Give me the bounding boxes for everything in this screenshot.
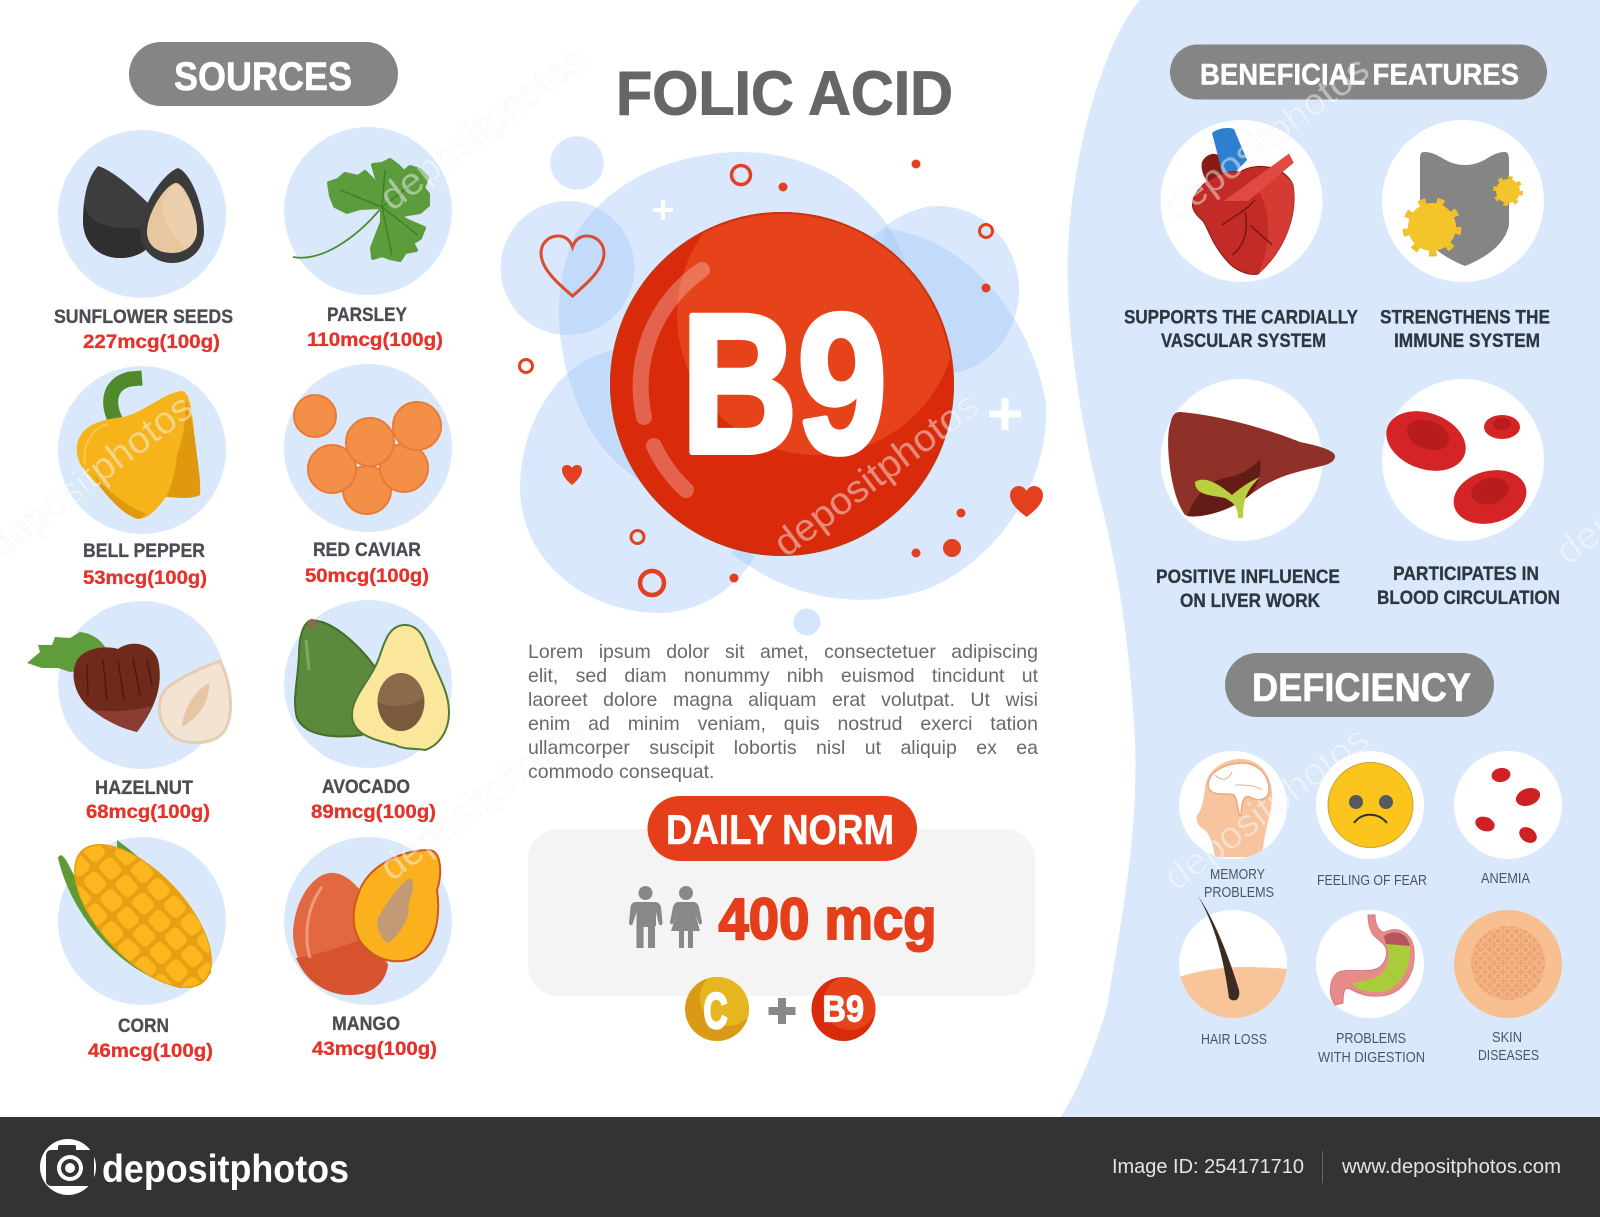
label: sunflower seeds: SUNFLOWER SEEDS: [54, 307, 233, 328]
icon: B9 ball: B9: [822, 989, 864, 1030]
label: liver: ON LIVER WORK: [1180, 591, 1320, 612]
label: hazelnut: 68mcg(100g): [86, 802, 210, 823]
label: avocado: [311, 777, 436, 823]
label: hazelnut: HAZELNUT: [95, 778, 193, 799]
icon: red caviar: [284, 364, 452, 532]
label: red caviar: RED CAVIAR: [313, 540, 421, 561]
heading: daily norm: DAILY NORM: [666, 806, 894, 853]
label: skin diseases: [1478, 1030, 1539, 1064]
label: skin diseases: SKIN: [1492, 1030, 1522, 1046]
label: mango: [312, 1014, 437, 1060]
watermarks: depositphotos: [372, 38, 593, 219]
icon: anemia cells: [1454, 751, 1562, 859]
paragraph text block: commodo consequat.: [528, 761, 714, 783]
box background: [528, 829, 1035, 996]
label: memory problems: [1204, 867, 1274, 901]
label: digestion: WITH DIGESTION: [1318, 1050, 1425, 1066]
label: red caviar: 50mcg(100g): [305, 566, 429, 587]
watermarks: [0, 38, 1600, 899]
vitamin B9 big ball: [610, 212, 954, 556]
icon: B9 ball: [812, 976, 877, 1041]
panel: beneficial features: [1124, 44, 1560, 612]
label: mango: MANGO: [332, 1014, 400, 1035]
label: digestion: [1318, 1031, 1425, 1066]
label: avocado: 89mcg(100g): [311, 802, 436, 823]
icon: outline heart: [541, 236, 604, 296]
label: cardiovascular: [1124, 308, 1358, 352]
icon: footer logo: [40, 1139, 96, 1195]
paragraph text block: elit, sed diam nonummy nibh euismod tincidunt ut: [528, 665, 1038, 687]
label: blood circulation: [1377, 564, 1560, 609]
heading: beneficial features: [1170, 44, 1547, 100]
label: parsley: [307, 305, 443, 351]
label: red caviar: [305, 540, 429, 587]
label: avocado: AVOCADO: [322, 777, 410, 798]
label: digestion: PROBLEMS: [1336, 1031, 1406, 1047]
label: parsley: 110mcg(100g): [307, 330, 443, 351]
title: FOLIC ACID: [616, 60, 953, 128]
value: 400 mcg: 400 mcg: [718, 887, 936, 952]
label: bell pepper: 53mcg(100g): [83, 568, 207, 589]
label: skin diseases: DISEASES: [1478, 1048, 1539, 1064]
background blobs: [500, 136, 1046, 613]
label: hair loss: HAIR LOSS: [1201, 1032, 1267, 1048]
icon: parsley: [284, 127, 452, 295]
paragraph text block: ullamcorper suscipit lobortis nisl ut aliquip ex ea: [528, 737, 1038, 759]
icon: stomach: [1316, 910, 1424, 1018]
label: liver: POSITIVE INFLUENCE: [1156, 567, 1340, 588]
paragraph text block: Lorem ipsum dolor sit amet, consectetuer adipiscing: [528, 641, 1038, 663]
label: blood circulation: PARTICIPATES IN: [1393, 564, 1539, 585]
icon: vitamin C ball: C: [704, 983, 728, 1039]
paragraph text block: enim ad minim veniam, quis nostrud exerci tation: [528, 713, 1038, 735]
panel: sources: [27, 42, 452, 1062]
icon: skin: [1454, 910, 1562, 1018]
icon: sad face: [1316, 751, 1424, 859]
icon: plus: [768, 998, 796, 1024]
icon: sunflower seeds: [58, 130, 226, 298]
panel: deficiency: [1179, 653, 1562, 1066]
heading: deficiency: DEFICIENCY: [1252, 666, 1471, 710]
label: corn: [88, 1016, 213, 1062]
label: immune: IMMUNE SYSTEM: [1394, 331, 1540, 352]
icon: small filled heart: [562, 465, 582, 485]
footer image id: Image ID: 254171710: [1112, 1156, 1304, 1178]
heading: sources: [129, 42, 398, 106]
label: parsley: PARSLEY: [327, 305, 407, 326]
icon: heart organ: [1160, 120, 1322, 282]
label: sunflower seeds: 227mcg(100g): [83, 332, 220, 353]
label: mango: 43mcg(100g): [312, 1039, 437, 1060]
label: liver: [1156, 567, 1340, 612]
right background panel: [1061, 0, 1600, 1117]
icon: hair: [1179, 896, 1288, 1020]
paragraph text block: laoreet dolore magna aliquam erat volutpat. Ut wisi: [528, 689, 1038, 711]
icon: red blood cells: [1378, 379, 1544, 541]
label: blood circulation: BLOOD CIRCULATION: [1377, 588, 1560, 609]
icon: shield with viruses: [1382, 120, 1544, 282]
heading: deficiency: [1225, 653, 1494, 717]
footer url: www.depositphotos.com: [1341, 1156, 1561, 1178]
icon: memory head: [1179, 751, 1287, 859]
icon: hazelnut: [27, 601, 230, 769]
icon: man and woman: [629, 886, 702, 948]
label: memory problems: MEMORY: [1210, 867, 1265, 883]
icon: mango: [284, 837, 452, 1005]
label: immune: STRENGTHENS THE: [1380, 308, 1550, 328]
label: cardiovascular: VASCULAR SYSTEM: [1161, 331, 1326, 352]
icon: large filled heart: [1010, 486, 1043, 517]
heading: beneficial features: BENEFICIAL FEATURES: [1200, 58, 1519, 91]
watermarks: depositphotos: [372, 708, 593, 889]
icon: avocado: [284, 600, 452, 768]
paragraph text block: [528, 641, 1038, 783]
footer logo text: depositphotos: [102, 1148, 349, 1191]
heading: daily norm: [648, 796, 917, 861]
watermarks: depositphotos: [766, 384, 987, 565]
icon: bell pepper: [58, 366, 226, 534]
label: cardiovascular: SUPPORTS THE CARDIALLY: [1124, 308, 1358, 328]
icon: corn: [50, 821, 236, 1011]
label: corn: CORN: [118, 1016, 169, 1037]
label: corn: 46mcg(100g): [88, 1041, 213, 1062]
watermarks: depositphotos: [1156, 48, 1377, 229]
icon: liver: [1160, 379, 1335, 541]
label: sunflower seeds: [54, 307, 233, 353]
watermarks: depositphotos: [1156, 718, 1377, 899]
label: memory problems: PROBLEMS: [1204, 885, 1274, 901]
label: anemia: ANEMIA: [1481, 871, 1530, 887]
label: feeling of fear: FEELING OF FEAR: [1317, 873, 1427, 889]
circle: small blob bottom: [794, 608, 820, 636]
vitamin B9 big ball: B9: [681, 273, 887, 494]
footer bar: [0, 1117, 1600, 1217]
label: immune: [1380, 308, 1550, 352]
icon: vitamin C ball: [685, 977, 749, 1041]
label: bell pepper: BELL PEPPER: [83, 541, 205, 562]
label: hazelnut: [86, 778, 210, 823]
icon: white plus signs: [653, 200, 1021, 430]
label: bell pepper: [83, 541, 207, 589]
decorations: dots and rings: [520, 160, 992, 595]
heading: sources: SOURCES: [174, 55, 352, 99]
panel: daily norm: [528, 796, 1035, 1041]
